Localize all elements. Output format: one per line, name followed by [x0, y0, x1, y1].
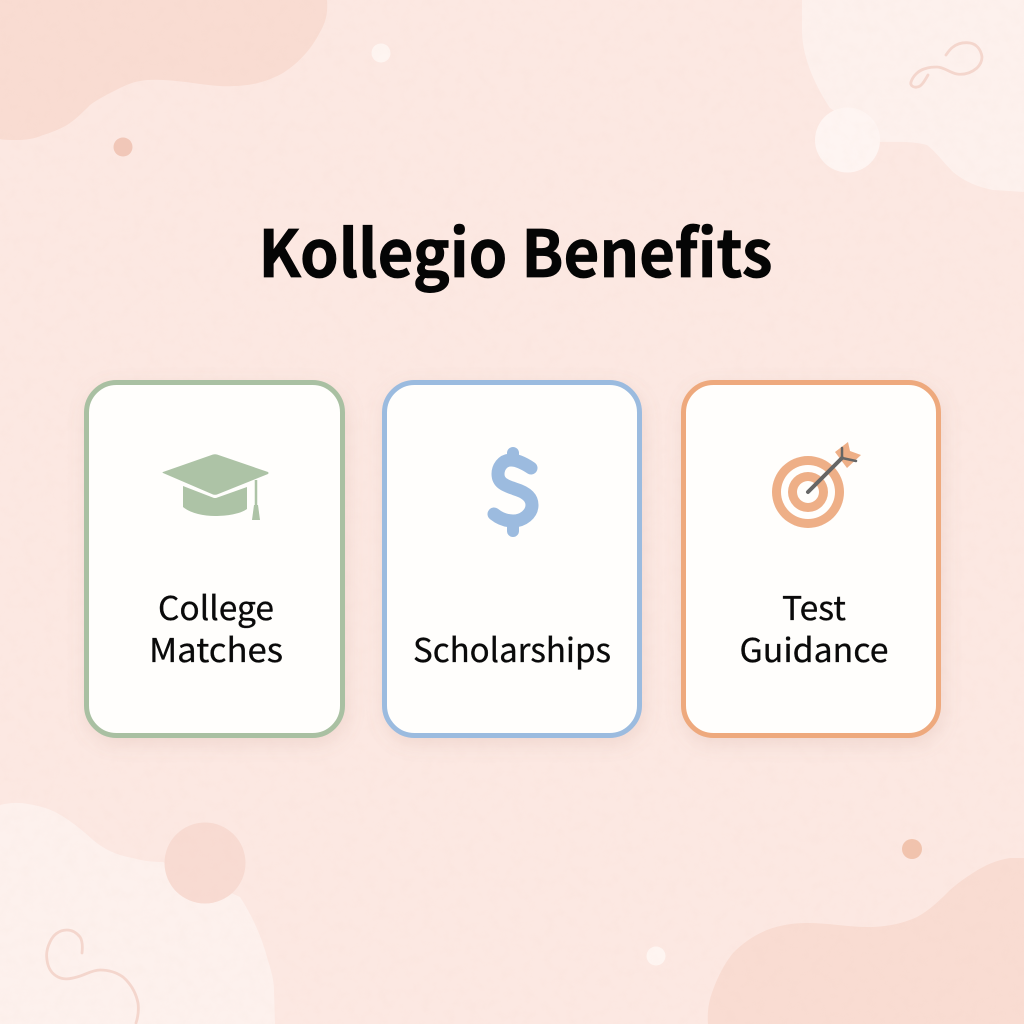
card frame: blue [384, 382, 640, 736]
icon: graduation cap [162, 454, 268, 520]
blob: top left [0, 0, 327, 140]
card: Scholarships [384, 382, 640, 736]
squiggle: top right [911, 43, 982, 87]
label: Test Guidance: Test [782, 582, 846, 630]
squiggle: bottom left [47, 930, 138, 1023]
blob: top right [802, 0, 1024, 192]
icon: dollar sign [494, 453, 532, 531]
blob: bottom left [0, 803, 275, 1024]
card frame: orange [684, 382, 938, 736]
card frame: green [86, 382, 342, 736]
title: Kollegio Benefits [258, 202, 772, 296]
dot: bottom centre [646, 946, 666, 966]
dot: bottom right [902, 839, 922, 859]
dot: top left [114, 138, 132, 156]
card: College Matches [86, 382, 342, 736]
label line 2: Guidance [740, 624, 888, 672]
blob circle: bottom left [164, 822, 246, 904]
icon: target with dart [772, 442, 861, 528]
label line 2: Matches [149, 624, 283, 672]
blob: bottom right [708, 858, 1024, 1024]
card: Test Guidance [684, 382, 938, 736]
blob circle: top right [815, 108, 880, 172]
dot: top centre [372, 44, 390, 62]
label: College Matches: College [158, 582, 274, 630]
label: Scholarships: Scholarships [413, 624, 611, 672]
